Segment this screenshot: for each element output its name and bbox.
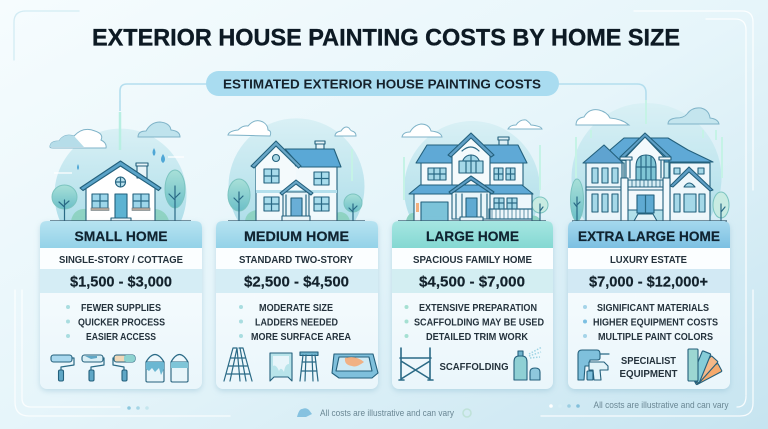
small home type: SINGLE-STORY / COTTAGE — [59, 254, 183, 266]
extra large home type: LUXURY ESTATE — [610, 254, 687, 266]
small home price: $1,500 - $3,000 — [70, 274, 172, 290]
panel: medium home — [216, 221, 378, 389]
extra large home list: HIGHER EQUIPMENT COSTS — [593, 318, 718, 328]
icons: ladders and trays — [224, 348, 378, 381]
connector lines — [120, 84, 646, 111]
large home list: EXTENSIVE PREPARATION — [419, 303, 537, 314]
icon: cloud — [297, 408, 312, 417]
medium home heading — [216, 221, 378, 248]
illustration: medium home — [228, 118, 365, 221]
specialist equipment label: SPECIALIST — [621, 355, 677, 367]
medium home list — [239, 303, 351, 343]
small home list: EASIER ACCESS — [86, 332, 156, 343]
small home heading: SMALL HOME — [74, 229, 168, 244]
specialist equipment label — [620, 355, 678, 380]
large home heading — [392, 221, 553, 248]
extra large home list — [583, 303, 718, 343]
extra large home heading: EXTRA LARGE HOME — [578, 229, 720, 244]
specialist equipment label: EQUIPMENT — [620, 368, 678, 380]
title: EXTERIOR HOUSE PAINTING COSTS BY HOME SIZE — [92, 24, 680, 52]
large home list — [404, 303, 544, 343]
large home list: SCAFFOLDING MAY BE USED — [414, 318, 544, 328]
small home list: QUICKER PROCESS — [78, 318, 165, 328]
large home type: SPACIOUS FAMILY HOME — [413, 254, 532, 266]
small home type — [40, 248, 202, 269]
icon: color ring — [463, 409, 471, 417]
extra large home list: MULTIPLE PAINT COLORS — [598, 332, 713, 343]
footer dots right — [549, 404, 580, 408]
extra large home price: $7,000 - $12,000+ — [589, 274, 708, 290]
icon: drills — [578, 350, 609, 380]
icon: scaffolding — [399, 348, 433, 380]
medium home type: STANDARD TWO-STORY — [239, 254, 353, 266]
small home price — [40, 269, 202, 293]
icon: paint swatch fan — [688, 349, 722, 385]
footer note right: All costs are illustrative and can vary — [594, 400, 729, 410]
medium home price — [216, 269, 378, 293]
extra large home list: SIGNIFICANT MATERIALS — [597, 303, 709, 314]
extra large home heading — [568, 221, 730, 248]
large home list: DETAILED TRIM WORK — [426, 332, 529, 343]
panel: small home — [40, 221, 202, 389]
large home price — [392, 269, 553, 293]
small home list: FEWER SUPPLIES — [81, 303, 161, 314]
footer dots left — [127, 406, 149, 410]
medium home heading: MEDIUM HOME — [244, 229, 349, 244]
large home heading: LARGE HOME — [426, 229, 519, 244]
footer note center: All costs are illustrative and can vary — [320, 408, 454, 418]
scaffolding label: SCAFFOLDING — [440, 361, 508, 373]
large home type — [392, 248, 553, 269]
illustration: extra large home — [570, 100, 729, 221]
medium home type — [216, 248, 378, 269]
illustration: large home — [398, 120, 548, 221]
icons: paint rollers and buckets — [51, 354, 188, 382]
illustration: small home — [50, 112, 191, 221]
panel: large home — [392, 221, 553, 389]
extra large home price — [568, 269, 730, 293]
panel: extra large home — [568, 221, 730, 389]
medium home list: MORE SURFACE AREA — [251, 332, 351, 343]
medium home list: MODERATE SIZE — [259, 303, 333, 314]
large home price: $4,500 - $7,000 — [419, 274, 525, 290]
medium home price: $2,500 - $4,500 — [244, 274, 349, 290]
small home heading — [40, 221, 202, 248]
medium home list: LADDERS NEEDED — [255, 318, 338, 328]
icon: spray can — [514, 347, 542, 380]
subtitle pill: ESTIMATED EXTERIOR HOUSE PAINTING COSTS — [223, 76, 541, 92]
small home list — [66, 303, 165, 343]
extra large home type — [568, 248, 730, 269]
subtitle pill — [206, 71, 559, 96]
